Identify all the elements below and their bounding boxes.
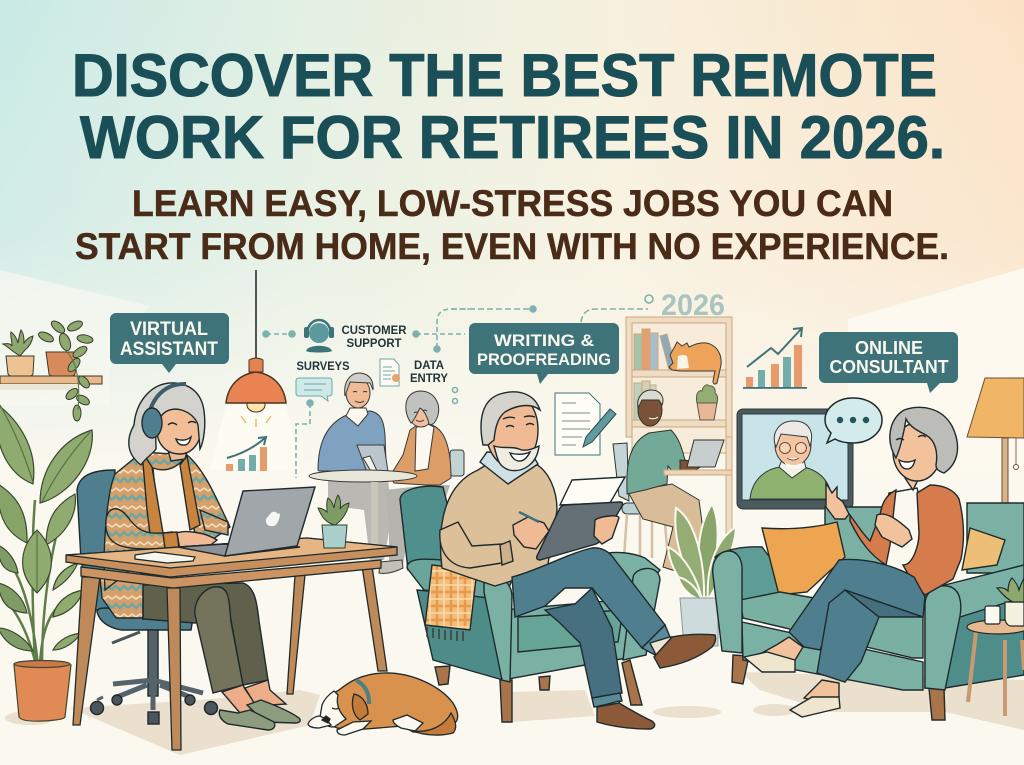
label: surveys: SURVEYS: [296, 361, 350, 373]
desk: [66, 538, 397, 750]
callout: online consultant: CONSULTANT: [830, 357, 948, 377]
plant on shelf: [696, 385, 718, 420]
icon: data entry document: [380, 359, 400, 386]
callout: writing and proofreading: [469, 323, 619, 384]
center man with tablet: [440, 392, 716, 729]
label: customer support: SUPPORT: [346, 338, 402, 350]
label: data entry: DATA: [414, 360, 444, 372]
2026 heading: 2026: [661, 289, 725, 322]
subtitle: [75, 183, 949, 267]
desk plant: [318, 495, 349, 548]
callout: virtual assistant: VIRTUAL: [130, 319, 208, 340]
speech bubble on monitor: [825, 398, 882, 443]
callout: writing and proofreading: PROOFREADING: [477, 350, 611, 369]
center potted plant: [668, 504, 736, 646]
callout: virtual assistant: [110, 313, 229, 373]
right sofa: [713, 503, 1024, 720]
title: WORK FOR RETIREES IN 2026.: [80, 104, 945, 171]
icon: document and pen: [555, 393, 616, 455]
title: DISCOVER THE BEST REMOTE: [72, 42, 937, 109]
icon: customer support headset: [304, 320, 334, 352]
left chair: [77, 470, 218, 724]
floor shadows: [5, 672, 1024, 755]
label: data entry: [410, 360, 448, 385]
connector lines: [263, 295, 653, 478]
callout: writing and proofreading: WRITING &: [494, 331, 594, 350]
bookshelf: [626, 317, 732, 567]
title: [72, 42, 945, 171]
cat on shelf: [669, 342, 721, 384]
label: data entry: ENTRY: [410, 373, 448, 385]
small bar chart: [226, 437, 267, 471]
center armchair: [400, 486, 660, 722]
side table with cup and plant: [967, 578, 1024, 716]
laptop on desk: [178, 487, 315, 556]
floor lamp: [967, 378, 1024, 504]
bar chart with arrow: [743, 328, 807, 389]
pendant lamp: [210, 270, 300, 470]
large potted plant: [0, 402, 92, 721]
left woman with headphones at desk: [100, 383, 300, 730]
right woman, seated and laughing: [744, 407, 963, 717]
video call monitor: [737, 409, 853, 509]
subtitle: LEARN EASY, LOW-STRESS JOBS YOU CAN: [132, 183, 893, 224]
label: customer support: CUSTOMER: [342, 325, 407, 337]
callout: online consultant: ONLINE: [855, 338, 923, 358]
callout: online consultant: [819, 332, 958, 393]
callout: virtual assistant: ASSISTANT: [120, 339, 218, 360]
icon: survey speech bubble: [296, 378, 332, 401]
label: customer support: [342, 325, 407, 350]
subtitle: START FROM HOME, EVEN WITH NO EXPERIENCE.: [75, 226, 949, 267]
background couple at table: [309, 373, 464, 573]
sleeping dog: [308, 673, 458, 735]
wall shelf with plants: [0, 319, 102, 421]
man at bookshelf with laptop: [613, 390, 732, 575]
